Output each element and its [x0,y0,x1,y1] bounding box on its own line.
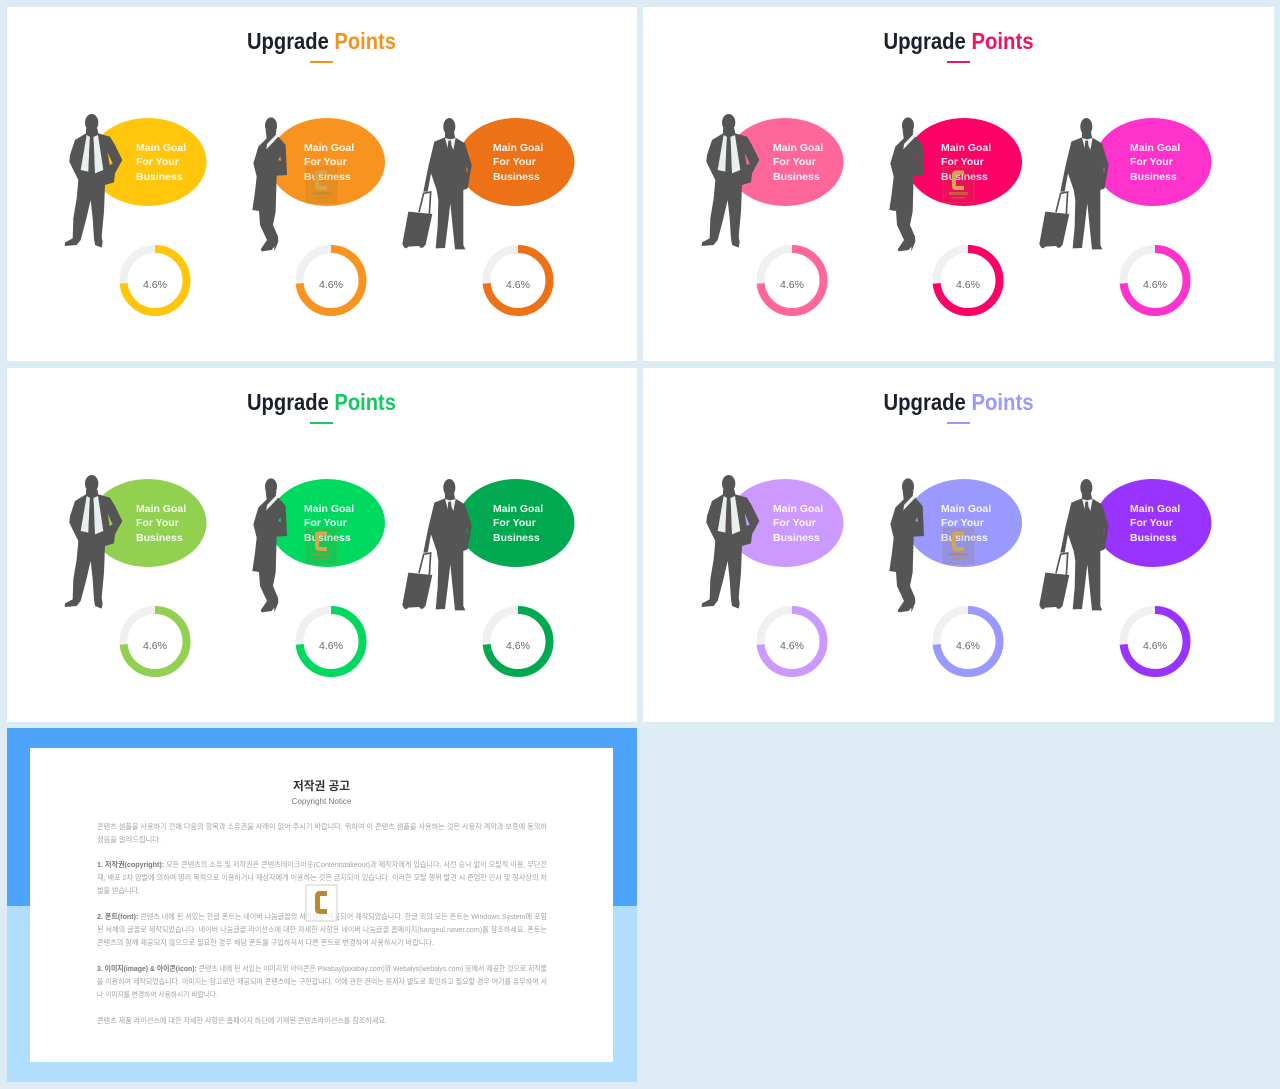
donut chart [760,249,824,312]
bubble text: For Your [941,517,984,529]
bubble text: Business [941,171,988,183]
title underline [310,61,333,63]
goal 2 [889,478,1022,673]
silhouette: traveller with suitcase [402,118,472,249]
goal 1 [65,475,206,673]
silhouette: traveller with suitcase [1039,118,1109,249]
donut chart: 4.6% [780,279,804,291]
panel: copyright notice [7,728,637,1082]
bubble text: Main Goal [136,142,186,154]
panel: pink theme [643,7,1274,361]
bubble text: For Your [493,517,536,529]
donut chart [760,610,824,673]
bubble text: Business [1130,171,1177,183]
title: Upgrade Points [884,28,1034,54]
silhouette: businesswoman [252,478,287,612]
bubble text: For Your [1130,156,1173,168]
goal 1 [702,114,844,312]
goal 2 [252,478,385,673]
bubble text: Main Goal [773,142,823,154]
panel: purple theme [643,368,1274,722]
bubble [458,479,574,567]
bubble text: For Your [493,156,536,168]
bubble [1094,118,1212,206]
bubble [906,479,1022,567]
section 3: image and icon: 을 이용하여 제작되었습니다. 이미지는 참고로만 제공되며 콘텐츠에는 구현합니다. 이에 관한 권리는 원저자 별도로 확인하고 필요할 경우 여기를 유무하여 서 [97,976,547,986]
silhouette: traveller with suitcase [1039,479,1109,610]
goal 2 [252,117,385,312]
bubble [269,118,385,206]
bubble text: For Your [136,517,179,529]
title: Upgrade Points [247,28,396,54]
goal 2 [889,117,1022,312]
donut chart [300,249,362,312]
section 3: image and icon [97,963,547,999]
silhouette: businesswoman [889,117,924,251]
closing paragraph: 콘텐츠 제품 라이선스에 대한 자세한 사항은 홈페이지 하단에 기재된 콘텐츠라이선스를 참조하세요. [97,1015,387,1025]
donut chart [936,610,1000,673]
silhouette: businesswoman [252,117,287,251]
goal 3 [1039,118,1212,312]
watermark [943,167,974,203]
bubble text: Main Goal [773,503,823,515]
donut chart [300,610,362,673]
donut chart: 4.6% [143,279,167,291]
bubble text: Main Goal [493,503,543,515]
donut chart [1124,610,1186,673]
bubble [90,118,206,206]
section 2: font: 콘텐츠의 함께 제공되지 않으므로 필요한 경우 해당 폰트를 구입하셔서 다른 폰트로 변경하여 사용하시기 바랍니다. [97,937,434,947]
bubble text: Business [304,532,351,544]
section 2: font: 된 서체의 글꼴로 제작되었습니다. 네이버 나눔글꼴 라이선스에 대한 자세한 사항은 네이버 나눔글꼴 홈페이지(hangeul.naver.com)를 참조하세요. 폰트는 [97,924,547,934]
bubble text: Business [1130,532,1177,544]
bubble text: Business [493,532,540,544]
section 3: image and icon: 3. 이미지(image) & 아이콘(icon): 콘텐츠 내에 된 서있는 이미지와 아이콘은 Pixabay(pixabay.com)와 Webalys(webalys.com) 등에서 제공한 것으로 저작물 [97,963,547,973]
bubble text: Main Goal [493,142,543,154]
goal 3 [1039,479,1212,673]
bubble text: For Your [1130,517,1173,529]
donut chart [936,249,1000,312]
panel: green theme [7,368,637,722]
bubble [458,118,574,206]
donut chart: 4.6% [319,640,343,652]
section 3: image and icon: 나 이미지를 변경하여 사용하시기 바랍니다. [97,989,218,999]
goal 3 [402,479,574,673]
bubble text: Main Goal [304,142,354,154]
bubble text: For Your [304,156,347,168]
donut chart [1124,249,1186,312]
title underline [947,61,970,63]
section 2: font [97,911,547,947]
silhouette: traveller with suitcase [402,479,472,610]
notice heading: 저작권 공고 [293,779,350,793]
bubble text: For Your [773,517,816,529]
bubble text: Main Goal [941,142,991,154]
bubble [726,118,844,206]
bubble text: Main Goal [136,503,186,515]
silhouette: businessman [65,114,122,248]
section 2: font: 2. 폰트(font): 콘텐츠 내에 된 서있는 한글 폰트는 네이버 나눔글꼴의 서작물로 제공되어 제작되었습니다. 한글 외의 모든 폰트는 Windows System에 포함 [97,911,547,921]
silhouette: businessman [702,114,759,248]
goal 3 [402,118,574,312]
donut chart [486,610,550,673]
bubble text: For Your [941,156,984,168]
intro paragraph [97,821,547,844]
intro paragraph: 셨음을 알려드립니다. [97,834,161,844]
bubble text: For Your [304,517,347,529]
bubble text: Business [136,532,183,544]
bubble text: Business [136,171,183,183]
bubble text: Business [773,171,820,183]
notice subheading: Copyright Notice [292,796,352,806]
bubble text: Main Goal [941,503,991,515]
goal 1 [702,475,844,673]
donut chart [124,610,186,673]
bubble text: Business [773,532,820,544]
bubble text: Main Goal [1130,142,1180,154]
watermark [306,528,337,564]
title underline [310,422,333,424]
section 1: copyright: 1. 저작권(copyright): 모든 콘텐츠의 소유 및 저작권은 콘텐츠테이크아웃(Contentstakeout)과 제작자에게 있습니다. 사전 승낙 없이 오탈적 이용, 무단전 [97,859,547,869]
donut chart: 4.6% [319,279,343,291]
section 1: copyright: 재, 배포 2차 양벌에 의하여 영리 목적으로 이용하거나 제삼자에게 이용하는 것은 금지되어 있습니다. 이러한 오탈 행위 발견 시 준엄한 민사 및 형사상의 처 [97,872,547,882]
bubble [90,479,206,567]
donut chart: 4.6% [1143,279,1167,291]
bubble text: Business [304,171,351,183]
donut chart [124,249,186,312]
silhouette: businesswoman [889,478,924,612]
watermark [306,167,337,203]
bubble text: Main Goal [1130,503,1180,515]
bubble [1094,479,1212,567]
watermark: gold C badge [306,885,337,921]
donut chart: 4.6% [956,279,980,291]
donut chart: 4.6% [1143,640,1167,652]
bubble text: For Your [136,156,179,168]
bubble text: Main Goal [304,503,354,515]
donut chart [486,249,550,312]
bubble text: Business [493,171,540,183]
silhouette: businessman [702,475,759,609]
title: Upgrade Points [247,389,396,415]
silhouette: businessman [65,475,122,609]
title underline [947,422,970,424]
watermark [943,528,974,564]
bubble text: Business [941,532,988,544]
section 1: copyright [97,859,547,895]
donut chart: 4.6% [143,640,167,652]
bubble [269,479,385,567]
donut chart: 4.6% [956,640,980,652]
donut chart: 4.6% [780,640,804,652]
title: Upgrade Points [884,389,1034,415]
donut chart: 4.6% [506,640,530,652]
donut chart: 4.6% [506,279,530,291]
bubble [906,118,1022,206]
bubble text: For Your [773,156,816,168]
section 1: copyright: 벌을 받습니다. [97,885,140,895]
panel: orange theme [7,7,637,361]
goal 1 [65,114,206,312]
bubble [726,479,844,567]
intro paragraph: 콘텐츠 샘플을 사용하기 전에 다음의 항목과 소유권을 사례이 읽어 주시기 바랍니다. 위하여 이 콘텐츠 샘플을 사용하는 것은 사용자 계약과 보증에 동의하 [97,821,547,831]
